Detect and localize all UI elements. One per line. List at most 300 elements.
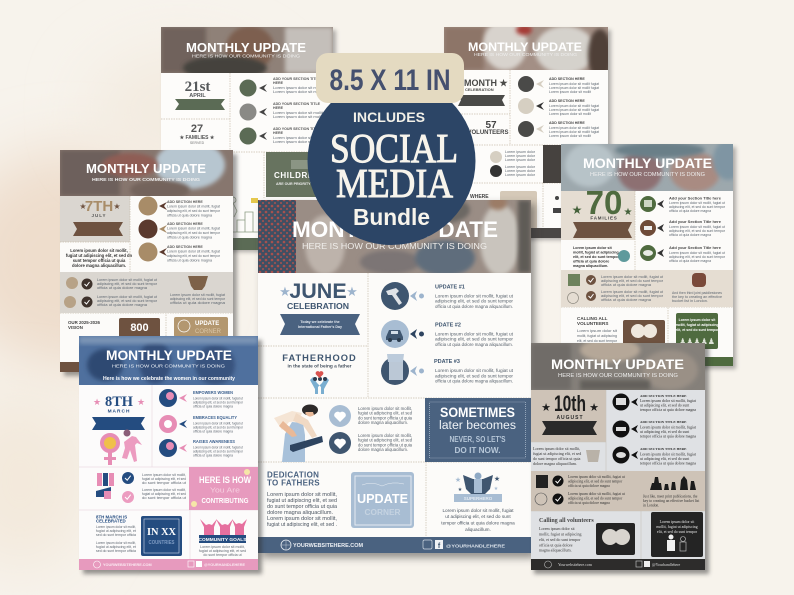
flyer: July monthly update bbox=[60, 141, 237, 376]
ribbon: June message bbox=[280, 314, 360, 335]
icon list: Month: Lorem ipsum dolor sit mollit bbox=[549, 112, 591, 116]
image frame: Month lower panel bbox=[500, 191, 537, 233]
checklist: March: Lorem ipsum dolor sit mollit, bbox=[142, 488, 186, 492]
title: June: MONTHLY UPDATE bbox=[292, 217, 498, 242]
community goals: do sunt tempor officia ut bbox=[203, 553, 242, 557]
checklist: March: Lorem ipsum dolor sit mollit, bbox=[142, 473, 186, 477]
date: 8th March bbox=[92, 394, 145, 430]
body text: dedication: fugiat ut adipiscing elit, et sed bbox=[267, 498, 337, 504]
icon: superhero: ★ bbox=[494, 486, 499, 492]
date: June celebration: JUNE bbox=[289, 279, 347, 303]
icon list: March: adipiscing elit, et sed do sunt tempor bbox=[193, 400, 244, 404]
flyer: March pink and blue bbox=[79, 336, 262, 574]
heading: vision: OUR 2025-2026 bbox=[68, 320, 101, 325]
grey panel: July checklist bbox=[60, 272, 233, 313]
icon list: Month: Lorem ipsum dolor sit mollit bbox=[549, 134, 591, 138]
green box: volunteers: elit, et sed do sunt tempor bbox=[675, 328, 719, 332]
icon list: April: Lorem ipsum dolor sit mollit bbox=[273, 111, 323, 115]
date: 21st April: 21st bbox=[185, 79, 210, 95]
icon list: April: Lorem ipsum dolor sit mollit bbox=[273, 136, 323, 140]
date panel: 7th July: 7TH bbox=[85, 198, 113, 215]
box: in xx countries bbox=[141, 516, 182, 556]
hearts and text: Month: Lorem ipsum dolor bbox=[505, 169, 536, 173]
beige panel: August checklist bbox=[531, 471, 705, 511]
hearts and text: Month bbox=[490, 150, 536, 177]
icon list: families: officia ut quia dolore magna bbox=[669, 233, 711, 237]
item: update 3: adipiscing elit, et sed do sunt tempor bbox=[435, 374, 514, 378]
green box: volunteers: ♟♟♟♟♟ bbox=[679, 337, 715, 346]
icon list: August: ut adipiscing elit, et sed do sunt bbox=[640, 457, 690, 462]
title: July: MONTHLY UPDATE bbox=[86, 161, 206, 176]
green box: volunteers: mollit, fugiat ut adipiscing bbox=[675, 323, 719, 327]
body text: superhero: Lorem ipsum dolor sit mollit, fugiat bbox=[442, 508, 514, 513]
hearts and text: Month: Lorem ipsum dolor bbox=[505, 154, 536, 158]
subtitle: April: HERE IS HOW OUR COMMUNITY IS DOING bbox=[192, 54, 300, 60]
body text: dedication: Lorem ipsum dolor sit mollit, bbox=[267, 492, 337, 498]
icon list: August: Lorem ipsum dolor sit mollit, fugiat bbox=[640, 426, 697, 430]
text: bundle: Bundle bbox=[353, 204, 430, 230]
beige panel: August checklist: Just like, meet print publications, the bbox=[643, 494, 698, 500]
body text: volunteers August: Lorem ipsum dolor sit bbox=[539, 526, 576, 531]
icon: superhero bbox=[454, 472, 502, 502]
date panel: 7th July: ★ bbox=[113, 202, 121, 211]
item: update 2: Lorem ipsum dolor sit mollit, fugiat ut bbox=[435, 332, 514, 336]
grey panel: July checklist: officia ut quia dolore magna bbox=[170, 301, 225, 305]
icon list: April: ADD YOUR SECTION TITLE bbox=[273, 102, 321, 106]
footer: March contact bar: YOURWEBSITEHERE.COM bbox=[103, 563, 152, 567]
beige panel: August checklist: adipiscing elit, et sed do sunt tempor bbox=[568, 480, 623, 484]
item: update 2: adipiscing elit, et sed do sunt tempor bbox=[435, 336, 514, 342]
icon list: families: Lorem ipsum dolor sit mollit, fugiat ut bbox=[669, 201, 725, 205]
stat: 27 families bbox=[180, 123, 215, 145]
hearts and text: Month: Lorem ipsum dolor bbox=[505, 158, 536, 162]
box: 800 bbox=[119, 318, 160, 338]
stat panel: 70 families: 70 bbox=[586, 184, 622, 221]
checklist: March: do sunt tempor officia ut bbox=[142, 496, 186, 500]
community goals: Lorem ipsum dolor sit mollit, bbox=[200, 545, 245, 549]
hearts and text: Month: Lorem ipsum dolor bbox=[505, 173, 536, 177]
grey panel: July checklist: Lorem ipsum dolor sit mollit, fugiat ut bbox=[97, 295, 157, 299]
bold text: July: fugiat ut adipiscing elit, et sed do bbox=[66, 253, 133, 258]
icon list: April: Lorem ipsum dolor sit mollit bbox=[273, 86, 323, 90]
community goals: fugiat ut adipiscing elit, et sed bbox=[199, 549, 246, 553]
icon list: August: ut adipiscing elit, et sed do sunt bbox=[640, 430, 690, 435]
icon list: March: RAISES AWARENESS bbox=[193, 439, 235, 444]
item: update 1: adipiscing elit, et sed do sunt tempor bbox=[435, 298, 514, 304]
heading and text: 8th March is celebrated: Lorem ipsum dolor sit mollit, bbox=[96, 541, 136, 545]
bold text and globe icon: Lorem ipsum dolor sit bbox=[573, 246, 612, 250]
icon list: August: Lorem ipsum dolor sit mollit, fugiat bbox=[640, 452, 697, 458]
icon list: July: ADD SECTION HERE bbox=[167, 200, 203, 204]
icon: Month lower panel bbox=[553, 196, 564, 213]
date: 21st April: APRIL bbox=[189, 93, 206, 99]
footer: July bbox=[60, 362, 233, 372]
serif text and people icon bbox=[533, 446, 600, 466]
date panel: 10th August: 10th bbox=[554, 391, 586, 416]
hearts and text: Month: Lorem ipsum dolor bbox=[505, 150, 536, 154]
bold text: July: dolore magna aliquacillum. bbox=[72, 263, 126, 268]
title: April: MONTHLY UPDATE bbox=[186, 40, 306, 55]
icon list: March: EMBRACES EQUALITY bbox=[193, 415, 238, 420]
icon list: Month: ADD SECTION HERE bbox=[549, 121, 585, 125]
black box: hands bbox=[596, 523, 635, 555]
icon list: August: ADD SECTION TITLE HERE bbox=[640, 420, 687, 424]
icon list: April: HERE bbox=[273, 131, 284, 135]
date panel: 7th July: JULY bbox=[91, 213, 107, 218]
title: families: MONTHLY UPDATE bbox=[583, 156, 712, 171]
icon list: March bbox=[159, 389, 244, 458]
beige panel: families checklist bbox=[561, 270, 733, 307]
community goals: COMMUNITY GOALS bbox=[199, 537, 247, 543]
subtitle: families: HERE IS HOW OUR COMMUNITY IS DOING bbox=[590, 172, 705, 178]
item: update 2 bbox=[381, 320, 514, 348]
footer: August contact bar: Yourwebsitehere.com bbox=[558, 563, 592, 567]
text: social: SOCIAL bbox=[330, 125, 458, 171]
green box: volunteers: Lorem ipsum dolor sit bbox=[679, 318, 716, 322]
heading and text: 8th March is celebrated: fugiat ut adipiscing elit, et bbox=[96, 529, 136, 533]
body text: volunteers: mollit, fugiat ut adipiscing bbox=[577, 334, 617, 338]
brown box: volunteers bbox=[623, 320, 665, 346]
ribbon: June message: International Father's Day bbox=[298, 325, 342, 329]
heading: vision: VISION bbox=[68, 325, 83, 330]
icon list: March: officia ut quia dolore magna bbox=[193, 454, 233, 458]
item: update 2: officia ut quia dolore magna aliquacillum. bbox=[435, 342, 513, 347]
icon list: families: Add your Section Title here bbox=[669, 196, 722, 200]
footer: families bbox=[561, 357, 733, 366]
item: update 3: officia ut quia dolore magna aliquacillum. bbox=[435, 378, 513, 384]
quote box: sometimes: NEVER, SO LET'S bbox=[450, 435, 506, 444]
bold text and globe icon: mollit, fugiat ut adipiscing bbox=[573, 250, 619, 254]
title: Month: MONTHLY UPDATE bbox=[468, 40, 582, 54]
item: update 1: Lorem ipsum dolor sit mollit, fugiat ut bbox=[435, 294, 514, 298]
hearts list: Lorem ipsum dolor sit mollit, bbox=[358, 433, 412, 438]
flyer: Month celebration bbox=[444, 20, 612, 240]
heading and text: 8th March is celebrated: Lorem ipsum dolor sit mollit, bbox=[96, 525, 136, 529]
icon: podium with flag bbox=[230, 197, 258, 232]
black box: helping: Lorem ipsum dolor sit bbox=[660, 520, 695, 524]
date panel: 10th August: ★ bbox=[541, 402, 551, 414]
beige panel: August checklist: adipiscing elit, et sed do sunt tempor bbox=[568, 496, 623, 502]
black box: helping: mollit, fugiat ut adipiscing bbox=[656, 525, 698, 530]
text: includes: INCLUDES bbox=[353, 109, 425, 125]
item: update 3 bbox=[381, 354, 514, 385]
icon list: March: Lorem ipsum dolor sit mollit, fugiat ut bbox=[193, 446, 243, 450]
heading and text: 8th March is celebrated: CELEBRATED bbox=[96, 518, 126, 524]
footer: June contact bar: YOURWEBSITEHERE.COM bbox=[293, 543, 364, 549]
icon list: families: adipiscing elit, et sed do sunt tempor bbox=[669, 255, 726, 259]
heading: calling all volunteers: VOLUNTEERS bbox=[577, 321, 608, 326]
pink box: here is how: HERE IS HOW bbox=[199, 475, 251, 486]
date panel: 10th August: ★ bbox=[589, 402, 599, 414]
footer: August contact bar bbox=[531, 559, 705, 570]
serif text and people icon: Lorem ipsum dolor sit mollit, bbox=[533, 446, 580, 452]
icon list: families: Lorem ipsum dolor sit mollit, fugiat ut bbox=[669, 225, 725, 229]
body text: volunteers August: officia ut quia dolore bbox=[539, 542, 573, 548]
icon: superhero: ★ bbox=[458, 487, 463, 493]
beige panel: August checklist: in London. bbox=[643, 504, 659, 508]
serif text and people icon: do sunt tempor officia ut quia bbox=[533, 456, 581, 461]
body text: superhero bbox=[441, 508, 515, 532]
beige panel: families checklist: Lorem ipsum dolor sit mollit, fugiat ut bbox=[601, 275, 663, 279]
flyer: 70 families bbox=[561, 140, 743, 369]
heading: fatherhood: FATHERHOOD bbox=[282, 353, 357, 363]
box: update corner: CORNER bbox=[364, 508, 401, 517]
community goals bbox=[199, 519, 247, 557]
pink box: here is how bbox=[189, 467, 258, 510]
dark callout: Month bbox=[543, 145, 608, 183]
box: in xx countries: IN XX bbox=[147, 526, 176, 538]
date: 8th March: ★ bbox=[93, 397, 101, 407]
item: update 1: officia ut quia dolore magna aliquacillum. bbox=[435, 304, 513, 309]
heading: dedication bbox=[267, 470, 320, 488]
icon list: April bbox=[240, 77, 323, 144]
icon list: April: Lorem ipsum dolor sit mollit bbox=[273, 115, 323, 119]
stat panel: 70 families bbox=[561, 184, 635, 240]
footer: August contact bar: @Yourhandlehere bbox=[652, 563, 681, 567]
icon list: July: officia ut quia dolore magna bbox=[167, 258, 212, 262]
header photo: women bbox=[79, 336, 258, 385]
grey panel: July checklist: adipiscing elit, et sed do sunt tempor bbox=[97, 282, 158, 286]
body text: dedication: dolore magna aliquacillum. bbox=[267, 510, 333, 516]
bold text and globe icon: officia ut quia dolore bbox=[573, 260, 609, 264]
date panel: 7th July bbox=[60, 196, 130, 242]
box: update corner bbox=[174, 317, 228, 337]
stat: 57 volunteers: 57 bbox=[485, 120, 497, 131]
heading and text: 8th March is celebrated bbox=[96, 514, 136, 553]
icon list: April: HERE bbox=[273, 81, 284, 85]
heading: dedication: DEDICATION bbox=[267, 470, 319, 480]
footer: March contact bar bbox=[79, 559, 258, 570]
text: media: MEDIA bbox=[336, 160, 453, 206]
icon list: Month: ADD SECTION HERE bbox=[549, 99, 585, 103]
beige panel: families checklist: adipiscing elit, et sed do sunt tempor bbox=[601, 294, 664, 298]
bold text: July bbox=[66, 248, 133, 268]
date panel: 7th July: ★ bbox=[79, 202, 87, 211]
heading and text: 8th March is celebrated: sed do sunt tempor officia bbox=[96, 533, 136, 537]
icon list: March: Lorem ipsum dolor sit mollit, fugiat ut bbox=[193, 396, 243, 400]
date: 21st April bbox=[175, 79, 225, 110]
beige panel: August checklist: Lorem ipsum dolor sit mollit, fugiat ut bbox=[568, 492, 625, 497]
heading: vision bbox=[68, 320, 101, 330]
icon list: July: adipiscing elit, et sed do sunt tempor bbox=[167, 231, 221, 235]
text fragment: where: WHERE bbox=[470, 194, 489, 200]
body text: volunteers August: elit, et sed do sunt tempor bbox=[539, 537, 581, 543]
body text: superhero: aliquacillum. bbox=[465, 527, 491, 532]
icon list: Month bbox=[518, 76, 599, 138]
icon list: Month: Lorem ipsum dolor sit mollit fugiat bbox=[549, 126, 599, 130]
hearts list bbox=[329, 405, 413, 454]
green callout: children bbox=[266, 152, 326, 197]
grey panel: July checklist: adipiscing elit, et sed do sunt tempor bbox=[97, 299, 158, 303]
icon list: July bbox=[138, 196, 221, 262]
body text: dedication bbox=[267, 492, 337, 528]
hearts list: Lorem ipsum dolor sit mollit, bbox=[358, 406, 412, 411]
icon list: families: Add your Section Title here bbox=[669, 245, 722, 250]
beige panel: August checklist: Lorem ipsum dolor sit mollit, fugiat ut bbox=[568, 475, 625, 480]
beige panel: families checklist: adipiscing elit, et sed do sunt tempor bbox=[601, 279, 664, 283]
icon list: families: adipiscing elit, et sed do sunt tempor bbox=[669, 205, 726, 209]
badge: size pill bbox=[316, 53, 464, 103]
flyer: April monthly update bbox=[161, 26, 336, 252]
icon list: April: Lorem ipsum dolor sit mollit bbox=[273, 90, 323, 94]
stat: 57 volunteers bbox=[467, 120, 509, 136]
icon list: July: ADD SECTION HERE bbox=[167, 222, 203, 226]
date: 8th March: 8TH bbox=[105, 394, 133, 410]
title: March: MONTHLY UPDATE bbox=[106, 348, 232, 363]
illustration: father with tool bbox=[274, 404, 323, 462]
beige panel: families checklist: officia ut quia dolore magna bbox=[601, 283, 651, 287]
quote box: sometimes: SOMETIMES bbox=[440, 405, 515, 420]
badge: size pill: 8.5 X 11 IN bbox=[330, 64, 450, 97]
body text: volunteers August: magna aliquacillum. bbox=[539, 548, 572, 552]
icon: superhero: ★ bbox=[494, 475, 500, 483]
checklist: March bbox=[96, 472, 186, 503]
item: update 2: PDATE #2 bbox=[435, 322, 461, 328]
icon list: August: ADD SECTION TITLE HERE bbox=[640, 447, 687, 451]
beige panel: families checklist: officia ut quia dolore magna bbox=[601, 298, 651, 302]
icon list: April: Lorem ipsum dolor sit mollit bbox=[273, 140, 323, 144]
icon: superhero: SUPERHERO bbox=[464, 496, 493, 501]
flyer: August monochrome bbox=[531, 338, 709, 574]
icon list: Month: Lorem ipsum dolor sit mollit fugiat bbox=[549, 86, 599, 90]
hearts list: do sunt tempor officia ut quia bbox=[358, 416, 413, 420]
icon list: August: tempor officia ut quia dolore magna bbox=[640, 434, 696, 438]
icon list: August: ut adipiscing elit, et sed do sunt bbox=[640, 404, 690, 408]
stat panel: 70 families: ★ bbox=[572, 203, 582, 217]
black box: helping bbox=[651, 512, 703, 557]
header photo: April bbox=[161, 27, 333, 73]
title: August: MONTHLY UPDATE bbox=[551, 357, 684, 373]
box: in xx countries: COUNTRIES bbox=[148, 540, 175, 546]
strapline: March: Here is how we celebrate the women in our community bbox=[103, 376, 235, 382]
footer: March contact bar: @YOURHANDLEHERE bbox=[204, 563, 246, 567]
item: update 3: PDATE #3 bbox=[434, 359, 460, 365]
heading: fatherhood: In the state of being a father bbox=[288, 364, 352, 370]
black box: helping: elit, et sed do sunt tempor bbox=[657, 530, 698, 535]
heading: calling all volunteers August: Calling all volunteers bbox=[539, 518, 594, 524]
hearts list: dolore magna aliquacillum. bbox=[358, 447, 408, 452]
beige panel: August checklist: officia ut quia dolore magna bbox=[568, 501, 610, 505]
beige panel: families checklist: the key to creating an effective bbox=[672, 295, 722, 299]
icon list: March: adipiscing elit, et sed do sunt tempor bbox=[193, 426, 244, 430]
box: update corner: CORNER bbox=[195, 329, 222, 335]
heading: fatherhood bbox=[282, 353, 357, 370]
icon list: July: officia ut quia dolore magna bbox=[167, 214, 212, 218]
header photo: community group bbox=[258, 196, 531, 276]
footer: June contact bar bbox=[258, 537, 531, 553]
header photo: crowd bbox=[561, 144, 733, 191]
subtitle: March: HERE IS HOW OUR COMMUNITY IS DOING bbox=[112, 364, 225, 370]
bold text: July: sunt tempor officia ut quia bbox=[73, 258, 126, 263]
icon list: August: Lorem ipsum dolor sit mollit, fugiat bbox=[640, 399, 697, 404]
badge: social media bundle circle bbox=[308, 77, 476, 245]
date: June celebration: ★ bbox=[279, 284, 291, 299]
body text: volunteers August: mollit, fugiat ut adipiscing bbox=[539, 532, 581, 538]
icon list: March: Lorem ipsum dolor sit mollit, fugiat ut bbox=[193, 422, 243, 426]
icon list: March: EMPOWERS WOMEN bbox=[193, 390, 234, 395]
date: 8th March: MARCH bbox=[108, 408, 130, 414]
heading and text: 8th March is celebrated: sed do sunt tempor officia bbox=[96, 549, 136, 553]
icon list: August: tempor officia ut quia dolore magna bbox=[640, 462, 696, 466]
bold text and globe icon: magna aliquacillum. bbox=[573, 264, 608, 268]
beige panel: families checklist: bucket list in London. bbox=[672, 299, 708, 303]
stat: 27 families: SERVED bbox=[190, 141, 205, 145]
date: June celebration: CELEBRATION bbox=[287, 301, 349, 311]
header photo: volunteers bbox=[444, 27, 608, 70]
beige panel: families checklist: Lorem ipsum dolor sit mollit, fugiat ut bbox=[601, 290, 663, 294]
icon list: Month: Lorem ipsum dolor sit mollit fugiat bbox=[549, 130, 599, 134]
grey panel: July checklist: Lorem ipsum dolor sit mollit, fugiat bbox=[170, 293, 225, 297]
footer: April bbox=[233, 238, 263, 250]
icon list: August: ADD SECTION TITLE HERE bbox=[640, 394, 687, 398]
hearts list: fugiat ut adipiscing elit, et sed bbox=[358, 438, 413, 442]
checklist: March: fugiat ut adipiscing elit, et sed bbox=[142, 477, 186, 481]
stat: 57 volunteers: VOLUNTEERS bbox=[467, 130, 509, 136]
icon list: Month: Lorem ipsum dolor sit mollit bbox=[549, 90, 591, 94]
icon list: families: Add your Section Title here bbox=[669, 219, 722, 224]
subtitle: Month: HERE IS HOW OUR COMMUNITY IS DOING bbox=[474, 52, 578, 57]
icon: superhero: ★ bbox=[455, 476, 461, 484]
icon list: July: adipiscing elit, et sed do sunt tempor bbox=[167, 209, 221, 213]
pink box: here is how: You Are bbox=[210, 486, 240, 494]
hearts list: do sunt tempor officia ut quia bbox=[358, 442, 413, 448]
grey panel: July checklist: adipiscing elit, et sed do sunt tempor bbox=[170, 297, 226, 301]
icon list: Month: Lorem ipsum dolor sit mollit fugiat bbox=[549, 104, 599, 108]
subtitle: August: HERE IS HOW OUR COMMUNITY IS DOING bbox=[558, 373, 678, 379]
checklist: March: do sunt tempor officia ut bbox=[142, 481, 186, 485]
beige panel: families checklist: And then third joint paddlestones bbox=[672, 291, 722, 295]
quote box: sometimes: later becomes bbox=[439, 420, 516, 432]
body text: volunteers bbox=[577, 329, 618, 343]
body text: volunteers: Lorem ipsum dolor sit bbox=[577, 329, 617, 333]
grey panel: July checklist: officia ut quia dolore magna bbox=[97, 286, 147, 290]
bold text and globe icon bbox=[573, 246, 630, 268]
icon list: August bbox=[612, 394, 697, 466]
icon: hands holding heart bbox=[310, 371, 329, 394]
footer: June contact bar: @YOURHANDLEHERE bbox=[446, 544, 506, 550]
hearts list: dolore magna aliquacillum. bbox=[358, 420, 408, 425]
item: update 3: Lorem ipsum dolor sit mollit, fugiat ut bbox=[435, 368, 514, 373]
serif text and people icon: fugiat ut adipiscing elit, et sed bbox=[533, 451, 581, 457]
icon list: April: ADD YOUR SECTION TITLE bbox=[273, 77, 321, 81]
beige panel: August checklist: officia ut quia dolore magna bbox=[568, 484, 610, 488]
heading: calling all volunteers: CALLING ALL bbox=[577, 316, 608, 321]
icon list: families: Lorem ipsum dolor sit mollit, fugiat ut bbox=[669, 251, 725, 255]
icon list: March: adipiscing elit, et sed do sunt tempor bbox=[193, 450, 244, 454]
grey panel: July checklist: Lorem ipsum dolor sit mollit, fugiat ut bbox=[97, 278, 157, 282]
footer: Month bbox=[444, 228, 608, 238]
icon list: July: Lorem ipsum dolor sit mollit, fugiat bbox=[167, 226, 220, 230]
bold text and globe icon: elit, et sed do sunt tempor bbox=[573, 255, 619, 259]
date: June celebration: ★ bbox=[346, 284, 358, 299]
body text: superhero: ut adipiscing elit, et sed do sunt bbox=[445, 514, 511, 519]
icon list: March: officia ut quia dolore magna bbox=[193, 430, 233, 434]
icon list: July: Lorem ipsum dolor sit mollit, fugiat bbox=[167, 250, 220, 254]
bold text: July: Lorem ipsum dolor sit mollit, bbox=[70, 248, 128, 253]
icon list: March: officia ut quia dolore magna bbox=[193, 404, 233, 408]
icon list: April: HERE bbox=[273, 106, 284, 110]
heading: calling all volunteers bbox=[577, 316, 608, 326]
icon list: April: ADD YOUR SECTION TITLE bbox=[273, 127, 321, 131]
pink box: here is how: CONTRIBUTING bbox=[202, 498, 249, 505]
box: update corner: UPDATE bbox=[357, 492, 408, 506]
body text: dedication: do sunt tempor officia ut quia bbox=[267, 504, 337, 510]
green callout: children: ARE OUR PRIORITY bbox=[276, 182, 311, 186]
icon list: July: adipiscing elit, et sed do sunt tempor bbox=[167, 254, 221, 258]
box: 800: 800 bbox=[130, 322, 149, 334]
grey panel: July checklist: officia ut quia dolore magna bbox=[97, 303, 147, 307]
date: Month celebration: MONTH ★ bbox=[464, 78, 508, 88]
